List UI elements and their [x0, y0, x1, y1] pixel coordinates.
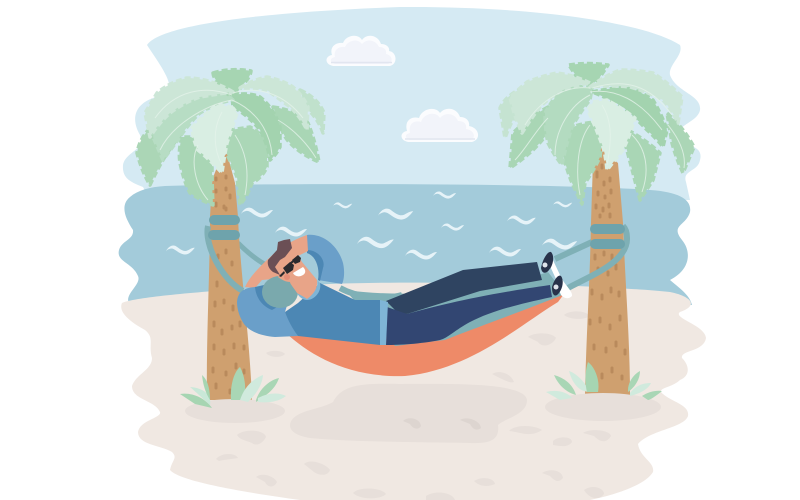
frond: left light: [510, 73, 590, 133]
left palm crown: [137, 70, 324, 205]
frond: lower left far: [510, 107, 550, 168]
pillow: [262, 276, 298, 308]
frond: lower center: [562, 122, 602, 204]
lower sleeve shade: [255, 285, 290, 310]
cloud left: [326, 36, 396, 66]
frond: top tuft: [569, 64, 608, 85]
frond: mid left: [545, 86, 592, 165]
left plant: [180, 367, 286, 408]
sand shadow patches: [216, 311, 611, 500]
lower sleeve: [237, 287, 298, 337]
frond: right mid: [232, 94, 280, 160]
frond: far left: [137, 122, 182, 185]
raised sleeve: [307, 235, 344, 284]
torso: [285, 283, 380, 345]
leg: far: [386, 262, 542, 314]
hammock: [285, 272, 565, 376]
shirt cuff: [380, 300, 388, 345]
frond: lower center: [225, 127, 267, 205]
hair: [268, 239, 292, 275]
frond: mid right: [592, 87, 667, 147]
collar: [297, 280, 320, 300]
frond: center light: [192, 105, 237, 173]
left palm trunk: [207, 153, 252, 400]
frond: right light: [590, 70, 682, 123]
right palm crown: [500, 64, 694, 204]
frond: lower left: [179, 137, 213, 205]
cloud right: [402, 109, 478, 142]
sunglasses: [279, 255, 301, 277]
left palm ropes: [207, 215, 243, 291]
right plant: [546, 362, 662, 400]
sand mound left: [185, 399, 285, 423]
cheek: [284, 274, 290, 280]
shoe: far: [541, 252, 560, 279]
frond: far right: [300, 90, 324, 133]
waves: [166, 191, 577, 260]
right palm trunk: [585, 143, 630, 395]
shoe: near: [552, 276, 572, 298]
frond: top tuft: [213, 70, 251, 96]
ropes behind hammock: [238, 243, 402, 298]
frond: lower right: [625, 130, 660, 200]
frond midribs: [155, 90, 316, 200]
sleeve inner shade: [307, 250, 324, 281]
sand mound right: [545, 393, 661, 421]
frond midribs: [515, 84, 684, 195]
right palm ropes: [555, 224, 627, 288]
frond: right light: [240, 77, 308, 130]
sea: [119, 184, 692, 305]
sand beach: [121, 283, 706, 500]
face: [278, 255, 317, 299]
frond: far right: [667, 113, 694, 173]
sky background: [123, 7, 701, 200]
frond: left mid: [153, 88, 233, 160]
leg: near: [386, 285, 552, 345]
raised forearm: [245, 235, 308, 288]
frond: far left: [500, 88, 523, 138]
man: [237, 235, 572, 345]
frond: left light: [145, 78, 233, 137]
smile: [293, 267, 305, 276]
frond: lower right: [273, 107, 319, 162]
frond: center light: [588, 100, 635, 170]
